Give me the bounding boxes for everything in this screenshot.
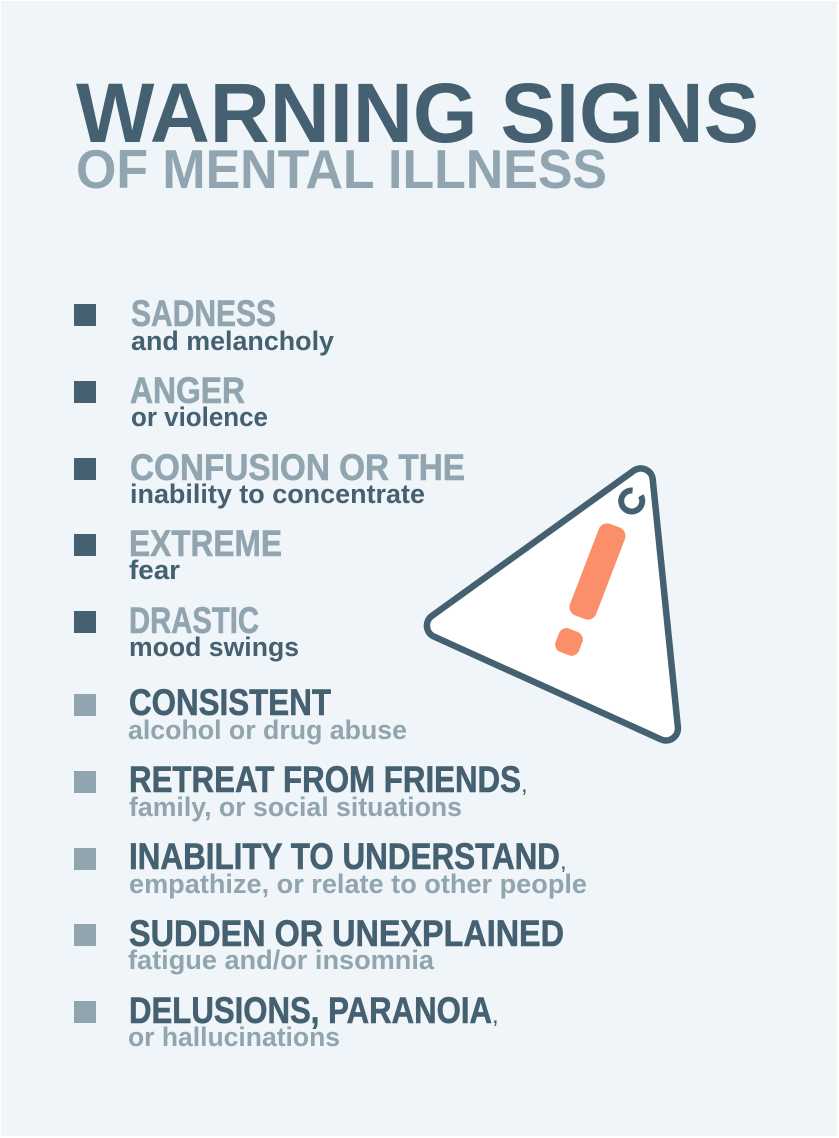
item: delusions: or hallucinations <box>128 1022 340 1052</box>
item: retreat from friends: , <box>521 771 528 798</box>
item: sadness <box>74 292 334 356</box>
item: anger: or violence <box>131 402 268 432</box>
item: consistent abuse: alcohol or drug abuse <box>128 715 407 745</box>
item: retreat from friends: RETREAT FROM FRIENDS <box>129 758 521 800</box>
item: sudden fatigue: SUDDEN OR UNEXPLAINED <box>129 912 564 954</box>
item: sudden fatigue: fatigue and/or insomnia <box>128 945 435 975</box>
item: drastic mood swings: mood swings <box>129 632 299 662</box>
item: retreat from friends <box>74 758 528 822</box>
item: consistent abuse: CONSISTENT <box>129 681 331 723</box>
item: drastic mood swings: DRASTIC <box>129 599 259 641</box>
item: confusion: CONFUSION OR THE <box>130 446 465 488</box>
item: delusions: DELUSIONS, PARANOIA <box>129 989 492 1031</box>
title <box>76 66 759 200</box>
item: anger: ANGER <box>130 369 245 411</box>
item: delusions <box>74 989 499 1052</box>
item: inability to understand: , <box>560 848 567 875</box>
item: confusion <box>74 446 465 509</box>
item: confusion: inability to concentrate <box>130 479 425 509</box>
item: extreme fear <box>74 522 282 585</box>
item: inability to understand: empathize, or relate to other people <box>129 869 587 899</box>
item: inability to understand: INABILITY TO UNDERSTAND <box>129 835 560 877</box>
title: WARNING SIGNS <box>76 66 759 160</box>
icon: warning tag triangle <box>427 468 678 740</box>
item: retreat from friends: family, or social situations <box>129 792 462 822</box>
item: drastic mood swings <box>74 599 299 662</box>
item: extreme fear: fear <box>129 555 181 585</box>
tag hole <box>621 490 642 511</box>
item: sadness: SADNESS <box>131 292 276 334</box>
warning list <box>74 292 587 1052</box>
item: delusions: , <box>492 1002 499 1029</box>
tag outline <box>427 468 678 740</box>
item: anger <box>74 369 268 432</box>
item: inability to understand <box>74 835 587 899</box>
item: consistent abuse <box>74 681 407 745</box>
item: sudden fatigue <box>74 912 564 975</box>
item: extreme fear: EXTREME <box>129 522 282 564</box>
title: OF MENTAL ILLNESS <box>76 138 607 200</box>
exclamation mark <box>553 521 628 658</box>
item: sadness: and melancholy <box>131 326 334 356</box>
